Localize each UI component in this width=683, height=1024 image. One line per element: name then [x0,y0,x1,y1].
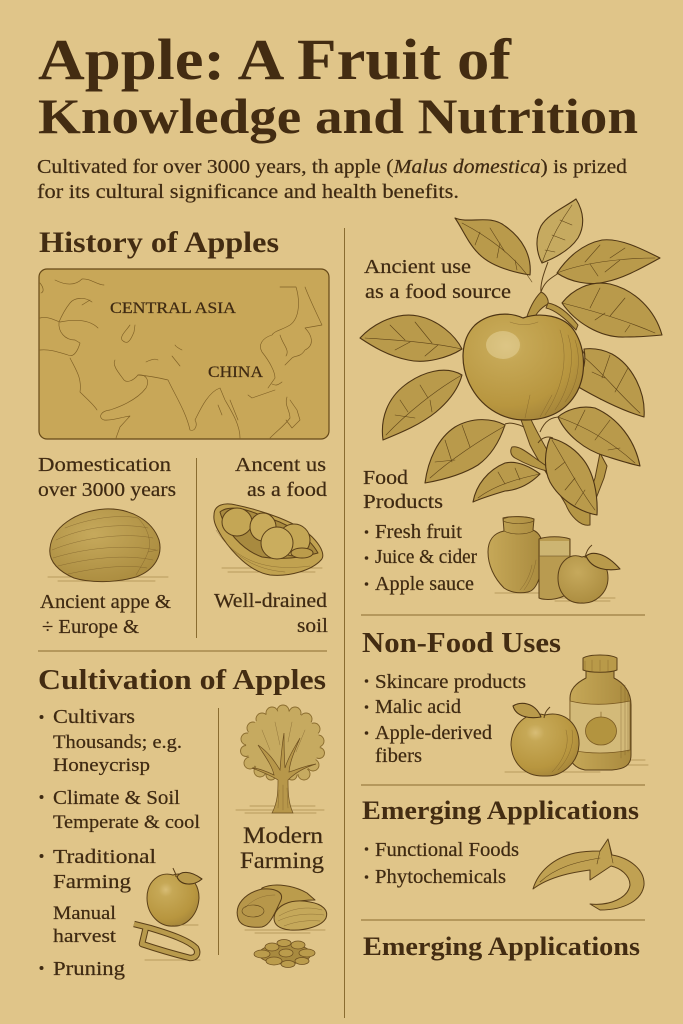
leaf: top left [455,218,532,282]
leaf: bottom small [473,462,540,502]
list: non-food uses: Skincare products [375,671,526,693]
list: emerging applications [365,839,519,888]
list: non-food uses: Malic acid [375,696,461,718]
list: cultivation bullets: Pruning [53,958,125,980]
jar [488,516,543,593]
divider: history bottom [38,650,327,652]
leaf: upper right [557,240,660,284]
list: food products: Fresh fruit [375,521,462,543]
icon: tree [236,705,324,813]
icon: bottle and apple [505,655,648,776]
bottle [570,655,631,770]
leaf: left lower [382,370,462,440]
text: ancient use as a food source: Ancient use [364,256,471,278]
list: cultivation bullets: Cultivars [53,706,135,728]
divider: non-food bottom [361,784,645,786]
divider: history columns [196,458,198,638]
apple [511,703,579,776]
heading: emerging applications: Emerging Applications [362,796,639,825]
text: well-drained soil [214,590,328,637]
leaf: lower right [558,407,640,466]
list: food products: Apple sauce [375,573,474,595]
text: modern farming: Modern [243,823,324,848]
heading: cultivation of apples: Cultivation of Apples [38,664,326,696]
illustration: apple branch [360,199,662,525]
text: ancient apple europe: Ancient appe & [40,591,171,613]
list: cultivation bullets: harvest [53,926,117,947]
list: cultivation bullets [40,706,200,980]
apple [463,314,584,420]
map label: central asia: CENTRAL ASIA [110,300,237,317]
text: domestication [38,454,176,501]
list: non-food uses [365,671,526,767]
heading: history of apples: History of Apples [39,226,279,259]
leaf: right middle [575,349,644,417]
icon: small apple [147,868,202,926]
icon: apple seed [48,509,168,582]
icon: bowl of apples [214,504,323,575]
list: cultivation bullets: Thousands; e.g. [53,733,182,753]
text: ancient use as a food: Ancent us [235,454,326,476]
divider: food products bottom [361,614,645,616]
map label: china: CHINA [208,364,264,381]
heading: emerging applications repeat: Emerging Applications [363,932,640,961]
icon: curved arrow [533,839,644,910]
text: ancient use as a food source [364,256,511,303]
text: ancient use as a food: as a food [247,479,327,501]
title: Apple: A Fruit of [38,27,512,92]
title [38,27,638,144]
heading: food products: Food [363,467,408,489]
list: non-food uses: fibers [375,745,422,767]
leaf: left upper [360,315,462,361]
branch [505,262,607,525]
icon: pruning tool [134,924,200,960]
list: cultivation bullets: Farming [53,871,131,893]
heading: food products: Products [363,491,443,513]
leaf: top centre [537,199,583,263]
leaf: lower left [425,420,505,483]
small apple [558,545,620,603]
text: domestication: Domestication [38,454,171,476]
title: Knowledge and Nutrition [38,88,638,144]
icon: seed pile [254,940,315,968]
list: food products [365,521,477,595]
text: ancient use as a food [235,454,327,501]
subtitle: for its cultural significance and health benefits. [37,181,459,203]
list: cultivation bullets: Honeycrisp [53,756,150,776]
list: emerging applications: Functional Foods [375,839,519,861]
text: ancient apple europe: ÷ Europe & [42,616,139,638]
subtitle [37,156,627,203]
list: cultivation bullets: Climate & Soil [53,787,180,809]
icon: jar, juice glass and apple [488,516,620,603]
heading: food products [363,467,443,513]
list: cultivation bullets: Traditional [53,846,157,868]
text: modern farming: Farming [240,848,325,873]
text: well-drained soil: Well-drained [214,590,327,612]
glass [539,537,570,599]
text: modern farming [240,823,325,873]
list: emerging applications: Phytochemicals [375,866,506,888]
divider: main column [344,228,346,1018]
divider: emerging bottom [361,919,645,921]
divider: cultivation columns [218,708,220,955]
text: ancient apple europe [40,591,171,638]
icon: apple slices [237,885,327,933]
list: cultivation bullets: Temperate & cool [53,813,200,833]
text: ancient use as a food source: as a food source [365,281,511,303]
text: domestication: over 3000 years [38,479,176,501]
list: food products: Juice & cider [375,546,477,568]
list: non-food uses: Apple-derived [375,722,492,744]
leaf: bottom centre [545,438,597,515]
map panel [39,269,329,439]
heading: non-food uses: Non-Food Uses [362,628,561,659]
list: cultivation bullets: Manual [53,903,116,924]
text: well-drained soil: soil [297,615,328,637]
subtitle: Cultivated for over 3000 years, th apple ( Malus domestica ) is prized [37,156,627,178]
leaf: right [562,283,662,337]
